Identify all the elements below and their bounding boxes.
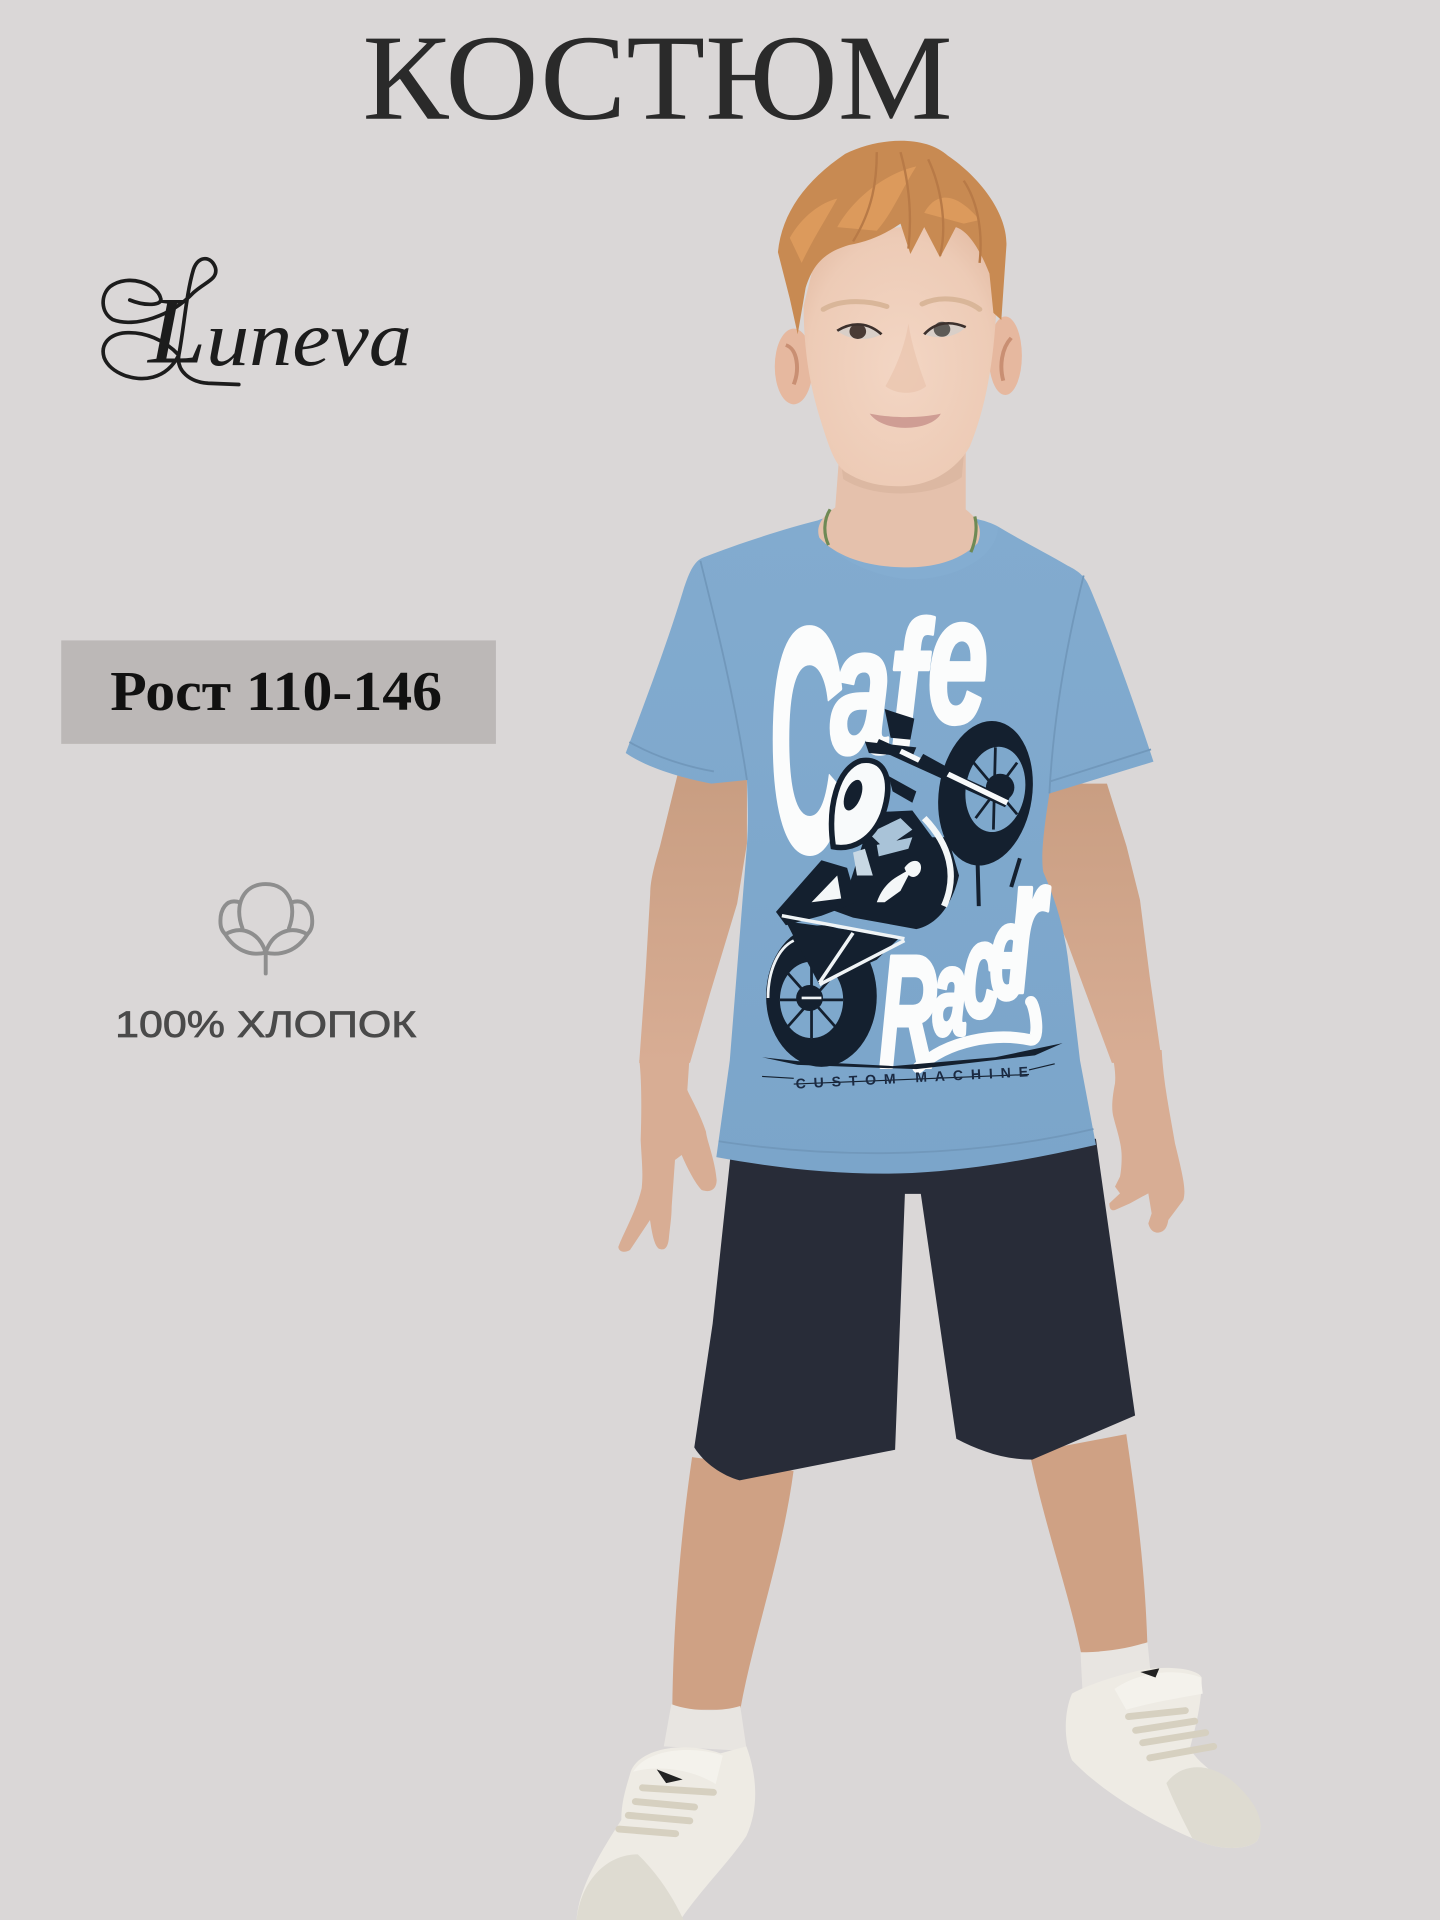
shorts	[694, 1139, 1135, 1480]
print lettering: Cafe: a	[830, 588, 891, 793]
print lettering: Racer: e	[989, 877, 1027, 1027]
collar	[818, 512, 998, 579]
motorcycle drawing	[762, 709, 1063, 1084]
print lettering: Racer: R	[879, 922, 937, 1101]
print lettering: Cafe: e	[927, 558, 988, 762]
print lettering: Racer: r	[1008, 815, 1051, 1034]
brand logo: Luneva: L	[146, 278, 207, 383]
left arm and hand	[618, 771, 747, 1252]
print lettering: Racer: c	[962, 895, 1000, 1045]
blue t-shirt	[626, 512, 1153, 1174]
height label: Рост 110-146	[110, 661, 442, 723]
head and neck	[775, 141, 1022, 567]
brand logo: Luneva: uneva	[206, 295, 412, 382]
brand logo: Luneva	[103, 259, 412, 384]
title: КОСТЮМ	[362, 11, 953, 146]
right arm and hand	[1035, 784, 1184, 1233]
icon: cotton boll	[220, 884, 312, 973]
print lettering: Racer: a	[933, 923, 967, 1061]
legs and shoes	[576, 1434, 1261, 1920]
panel: height range	[61, 640, 496, 744]
shirt print: Cafe Racer motorcycle	[762, 558, 1063, 1101]
print lettering: Cafe: f	[889, 584, 936, 789]
print lettering: Cafe	[769, 558, 988, 920]
boy model photo illustration	[576, 141, 1261, 1920]
print lettering: Cafe: C	[769, 561, 845, 920]
print tagline: CUSTOM MACHINE	[795, 1063, 1028, 1092]
material label: 100% ХЛОПОК	[115, 1004, 417, 1045]
